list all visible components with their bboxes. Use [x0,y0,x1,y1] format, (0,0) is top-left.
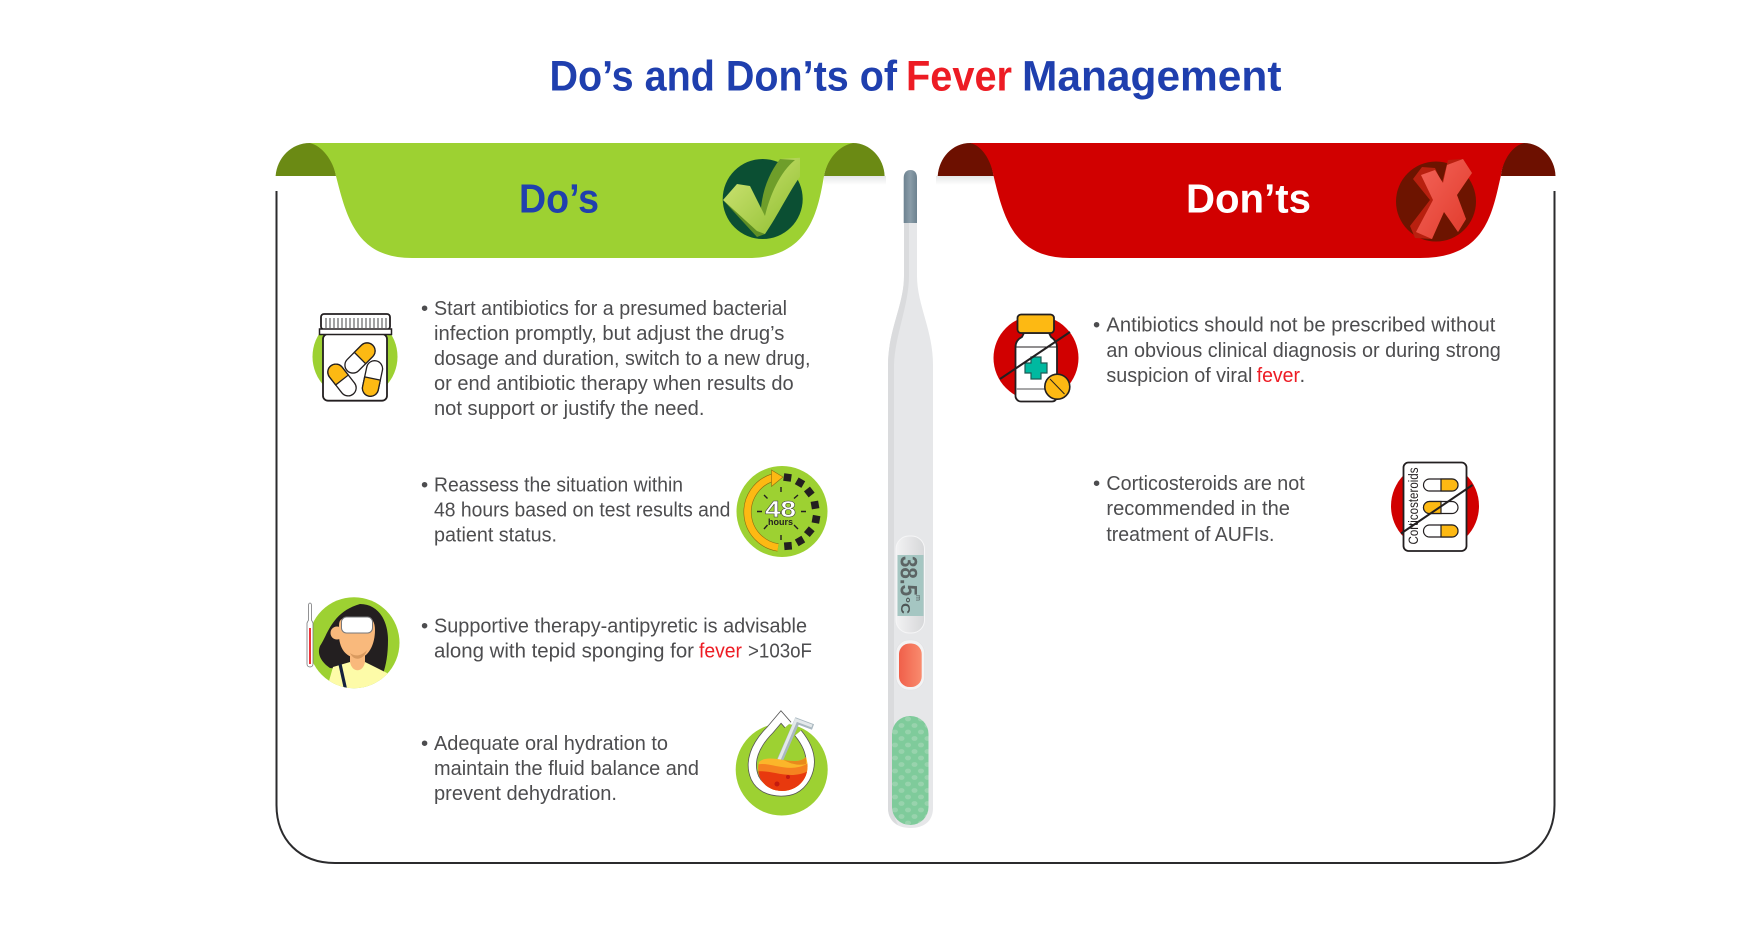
text block: Start antibiotics for a presumed bacterial [434,297,787,320]
text block: not support or justify the need. [434,397,704,420]
flap right [824,143,885,176]
text block: • [421,732,428,755]
item: oral hydration [421,717,828,816]
text block: >103oF [748,640,812,663]
text block: Reassess the situation within [434,474,683,497]
thermometer display: °C [898,597,913,615]
icon: red cross [1396,159,1476,242]
thermometer body [888,182,933,828]
thermometer tip [904,170,917,223]
text block [1093,314,1501,387]
thermometer grip [892,716,928,825]
flap shadows [824,176,996,185]
thermometer display [894,536,924,633]
text block: prevent dehydration. [434,782,617,805]
icon: hydration drink [736,717,828,816]
text block: patient status. [434,524,557,547]
title: Management [1022,52,1282,100]
item: corticosteroids [1093,462,1479,551]
panel outline [276,191,1554,863]
icon: 48 hours clock: 48 [765,496,796,522]
thermometer body shade [888,223,909,825]
thermometer button [896,640,924,690]
icon: green check [723,158,803,239]
text block [421,297,810,420]
thermometer display: 38.5 [894,556,922,596]
text block [421,732,699,805]
item: reassess [421,466,828,557]
title [550,52,1282,100]
text block: • [1093,472,1100,495]
title: Fever [906,52,1012,100]
heading: Do’s [519,175,599,221]
heading: Don’ts [1186,175,1311,221]
text block: • [421,474,428,497]
ribbon: Don'ts [938,143,1556,258]
ribbon band [310,143,853,258]
text block: treatment of AUFIs. [1106,523,1274,546]
text block: • [421,297,428,320]
text block: Antibiotics should not be prescribed without [1106,314,1496,337]
flap right [1501,143,1556,176]
thermometer [888,170,933,828]
text block: or end antibiotic therapy when results do [434,372,794,395]
ribbon: Do's [276,143,885,258]
title: Do’s and Don’ts of [550,52,898,100]
text block: dosage and duration, switch to a new drug, [434,347,810,370]
text block: fever [1257,364,1300,387]
text block: infection promptly, but adjust the drug’s [434,322,784,345]
text block: fever [699,640,742,663]
flap left [276,143,336,176]
text block [421,615,812,663]
text block: 48 hours based on test results and [434,499,730,522]
text block: along with tepid sponging for [434,640,694,663]
text block: Adequate oral hydration to [434,732,668,755]
text block: suspicion of viral [1106,364,1252,387]
text block [1093,472,1305,546]
text block [421,474,730,547]
icon: pill jar [312,314,398,401]
text block: recommended in the [1106,497,1290,520]
ribbon band [970,143,1524,258]
text block: • [421,615,428,638]
item: supportive therapy [307,597,812,695]
thermometer display: m [914,595,921,601]
text block: • [1093,314,1100,337]
juice [758,757,808,791]
small thermometer [307,603,313,667]
text block: Supportive therapy-antipyretic is advisable [434,615,807,638]
text block: . [1300,364,1305,387]
straw [780,721,813,760]
flap left [938,143,994,176]
icon: corticosteroid blister pack: Corticosteroids [1405,468,1421,544]
icon: medicine bottle [994,314,1078,402]
item: start antibiotics [312,297,810,420]
icon: 48 hours clock [736,466,828,557]
text block: an obvious clinical diagnosis or during strong [1106,339,1501,362]
item: antibiotics not prescribed [994,314,1501,402]
icon: 48 hours clock: hours [768,517,793,528]
icon: woman with compress [307,597,400,695]
text block: Corticosteroids are not [1106,472,1305,495]
text block: maintain the fluid balance and [434,757,699,780]
icon: corticosteroid blister pack [1391,462,1479,551]
